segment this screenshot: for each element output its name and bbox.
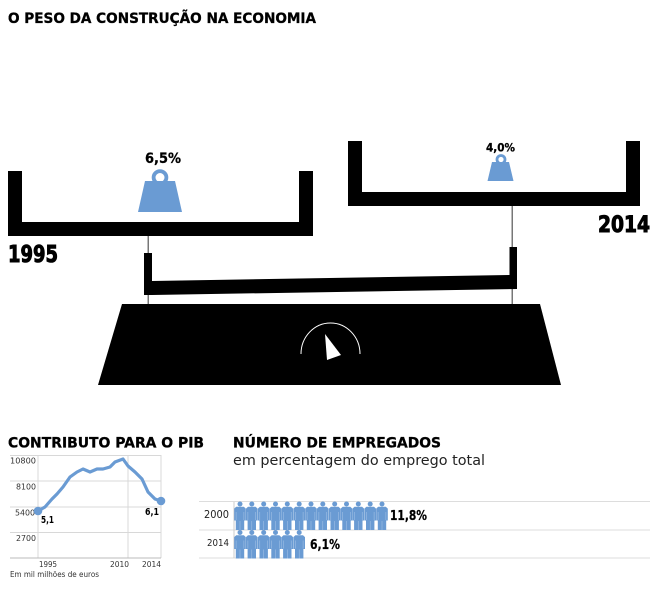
y axis labels: 10800 bbox=[10, 456, 36, 466]
value 5,1: 5,1 bbox=[41, 515, 54, 526]
y axis labels: 2700 bbox=[16, 534, 36, 543]
scale base bbox=[98, 304, 561, 385]
unit note: Em mil milhões de euros bbox=[10, 570, 99, 579]
row 2014 label: 2014 bbox=[207, 538, 229, 549]
pictogram chart: empregados bbox=[199, 502, 650, 558]
weight 2014 bbox=[486, 140, 515, 181]
y axis labels: 5400 bbox=[15, 508, 35, 518]
right support rod bbox=[512, 206, 513, 304]
right pan 2014 bbox=[348, 141, 640, 206]
balance beam bbox=[144, 247, 517, 295]
x axis labels: 1995 bbox=[39, 560, 57, 569]
left support rod bbox=[148, 236, 149, 304]
row 2014 pictograms bbox=[234, 530, 305, 558]
row 2000 label: 2000 bbox=[204, 509, 229, 521]
row 2000 value: 11,8% bbox=[390, 509, 427, 524]
subheading: em percentagem do emprego total bbox=[233, 453, 485, 469]
heading: número de empregados: NÚMERO DE EMPREGADOS bbox=[233, 434, 441, 452]
heading: contributo para o PIB: CONTRIBUTO PARA O PIB bbox=[8, 436, 204, 452]
title: O PESO DA CONSTRUÇÃO NA ECONOMIA bbox=[8, 10, 317, 27]
y axis labels: 8100 bbox=[16, 482, 36, 492]
label 4,0%: 4,0% bbox=[486, 140, 515, 154]
x axis labels: 2014 bbox=[142, 560, 161, 569]
label 6,5%: 6,5% bbox=[145, 151, 181, 167]
end point bbox=[157, 497, 165, 505]
year label 1995: 1995 bbox=[8, 242, 58, 268]
line chart: contributo para o PIB bbox=[10, 455, 165, 579]
y axis labels bbox=[10, 456, 36, 543]
weight 1995 bbox=[138, 151, 182, 212]
scale illustration bbox=[8, 141, 640, 385]
dial arc bbox=[301, 323, 360, 354]
x axis labels bbox=[39, 560, 161, 569]
data line bbox=[38, 459, 161, 511]
start point bbox=[34, 507, 42, 515]
left pan 1995 bbox=[8, 171, 313, 236]
year label 2014: 2014 bbox=[598, 213, 650, 238]
value 6,1: 6,1 bbox=[145, 507, 159, 518]
row 2014 value: 6,1% bbox=[310, 538, 340, 553]
dial needle bbox=[325, 334, 341, 360]
x axis labels: 2010 bbox=[110, 560, 129, 569]
row 2000 pictograms bbox=[234, 502, 388, 530]
